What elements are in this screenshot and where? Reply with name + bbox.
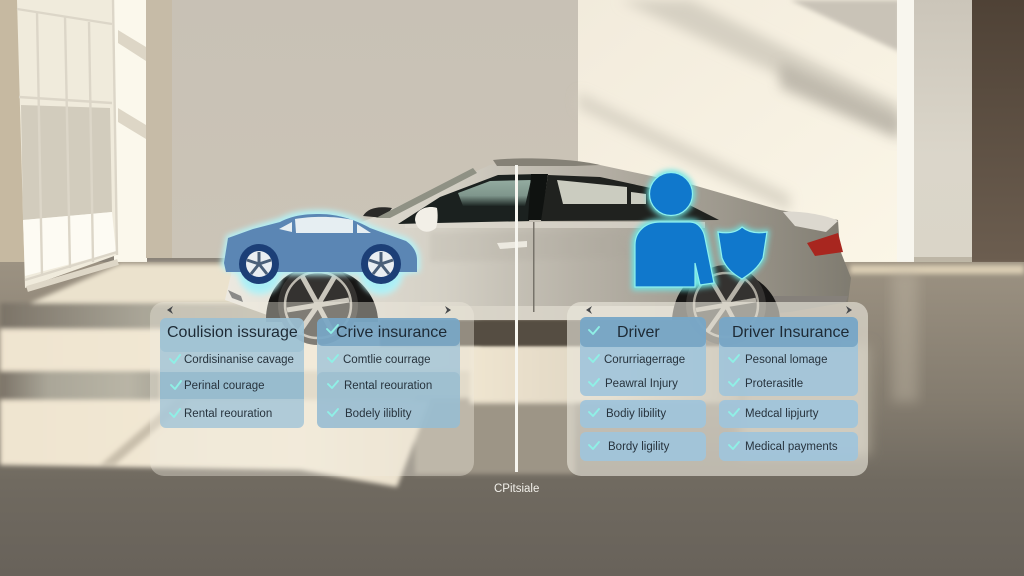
- card: driver: Corurriagerrage: [604, 354, 685, 366]
- left wall and reveal: [0, 0, 27, 310]
- rear wheel: [672, 265, 780, 345]
- card: collision insurance: Perinal courage: [184, 380, 265, 392]
- card: drive insurance: Comtlie courrage: [343, 354, 431, 366]
- car photo: [225, 158, 851, 346]
- card: driver insurance: Medcal lipjurty: [745, 408, 819, 420]
- card: driver insurance: Medical payments: [745, 441, 838, 453]
- heading: Driver: [617, 324, 660, 341]
- center divider line: [515, 165, 518, 472]
- front wheel: [266, 265, 378, 345]
- windshield: [376, 168, 477, 218]
- icon: shield: [718, 227, 767, 279]
- wiper: [363, 207, 392, 218]
- floor: [0, 262, 1024, 576]
- sunroof bar: [493, 158, 600, 166]
- tail light: [807, 233, 843, 256]
- window: [17, 0, 118, 289]
- right arrow marker: [445, 306, 451, 314]
- card: driver: [580, 317, 706, 461]
- windows: [398, 174, 540, 224]
- card: collision insurance: Cordisinanise cavage: [184, 354, 294, 366]
- panel: right coverage: [567, 302, 868, 476]
- card: driver insurance: Pesonal lomage: [745, 354, 827, 366]
- card: driver: Bodiy libility: [606, 408, 666, 420]
- left arrow marker: [586, 306, 592, 314]
- card: collision insurance: [160, 318, 304, 428]
- heading: Coulision issurage: [167, 324, 298, 341]
- card: driver: Peawral Injury: [605, 378, 678, 390]
- card: drive insurance: Bodely iliblity: [345, 408, 412, 420]
- card: driver insurance: Proterasitle: [745, 378, 803, 390]
- icon: driver person: [634, 170, 715, 288]
- card: collision insurance: Rental reouration: [184, 408, 272, 420]
- trunk deck: [783, 212, 838, 232]
- right arrow marker: [846, 306, 852, 314]
- panel: left coverage: [150, 302, 474, 476]
- heading: Driver Insurance: [732, 324, 849, 341]
- card: drive insurance: [317, 318, 460, 428]
- left arrow marker: [167, 306, 173, 314]
- heading: Crive insurance: [336, 324, 447, 341]
- icon: car: [223, 212, 418, 293]
- card: drive insurance: Rental reouration: [344, 380, 432, 392]
- door handle: [497, 241, 527, 249]
- card: driver: Bordy ligility: [608, 441, 670, 453]
- headlight: [228, 290, 243, 302]
- car shadow: [380, 320, 840, 346]
- center caption: CPitsiale: [494, 483, 539, 495]
- mirror: [415, 207, 438, 232]
- card: driver insurance: [719, 317, 858, 461]
